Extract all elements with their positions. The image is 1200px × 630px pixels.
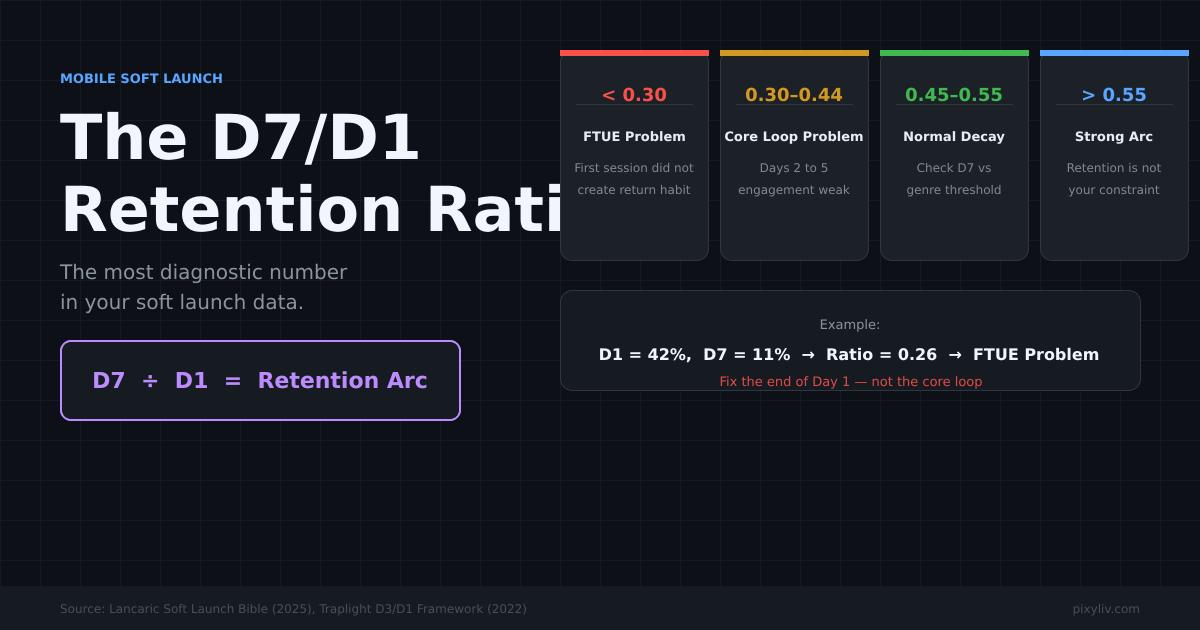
panel: normal decay card: genre threshold [906, 183, 1002, 197]
title [60, 101, 608, 246]
subtitle: in your soft launch data. [60, 290, 304, 314]
panel: FTUE problem card: First session did not [574, 161, 694, 175]
footer bar: Source: Lancaric Soft Launch Bible (2025), Traplight D3/D1 Framework (2022) [60, 602, 527, 616]
panel: worked example: D1 = 42%, D7 = 11% → Ratio = 0.26 → FTUE Problem [599, 345, 1099, 364]
panel: FTUE problem card: < 0.30 [601, 85, 667, 106]
panel: FTUE problem card: create return habit [577, 183, 691, 197]
panel: normal decay card: Check D7 vs [917, 161, 991, 175]
panel: FTUE problem card [560, 50, 709, 260]
panel: core loop problem card: engagement weak [738, 183, 850, 197]
subtitle: The most diagnostic number [59, 260, 348, 284]
panel: core loop problem card: Core Loop Problem [724, 130, 864, 145]
eyebrow label: MOBILE SOFT LAUNCH [60, 72, 223, 87]
panel: core loop problem card [720, 50, 869, 260]
panel: worked example: Example: [820, 318, 880, 333]
footer bar: pixyliv.com [1073, 602, 1140, 616]
title: Retention Ratio [60, 173, 608, 246]
panel: worked example [560, 290, 1140, 390]
panel: strong arc card: Retention is not [1067, 161, 1162, 175]
panel: core loop problem card: 0.30–0.44 [745, 85, 843, 106]
panel: strong arc card: Strong Arc [1075, 130, 1153, 145]
title: The D7/D1 [60, 101, 422, 174]
formula box: D7 ÷ D1 = Retention Arc [92, 369, 428, 394]
panel: strong arc card: > 0.55 [1081, 85, 1147, 106]
panel: strong arc card: your constraint [1068, 183, 1160, 197]
panel: worked example: Fix the end of Day 1 — not the core loop [719, 375, 983, 390]
panel: FTUE problem card: FTUE Problem [583, 130, 686, 145]
subtitle [59, 260, 348, 314]
panel: strong arc card [1040, 50, 1189, 260]
formula box [61, 341, 460, 420]
panel: core loop problem card: Days 2 to 5 [760, 161, 828, 175]
footer bar [0, 586, 1200, 630]
panel: normal decay card: Normal Decay [903, 130, 1005, 145]
panel: normal decay card: 0.45–0.55 [905, 85, 1003, 106]
panel: normal decay card [880, 50, 1029, 260]
